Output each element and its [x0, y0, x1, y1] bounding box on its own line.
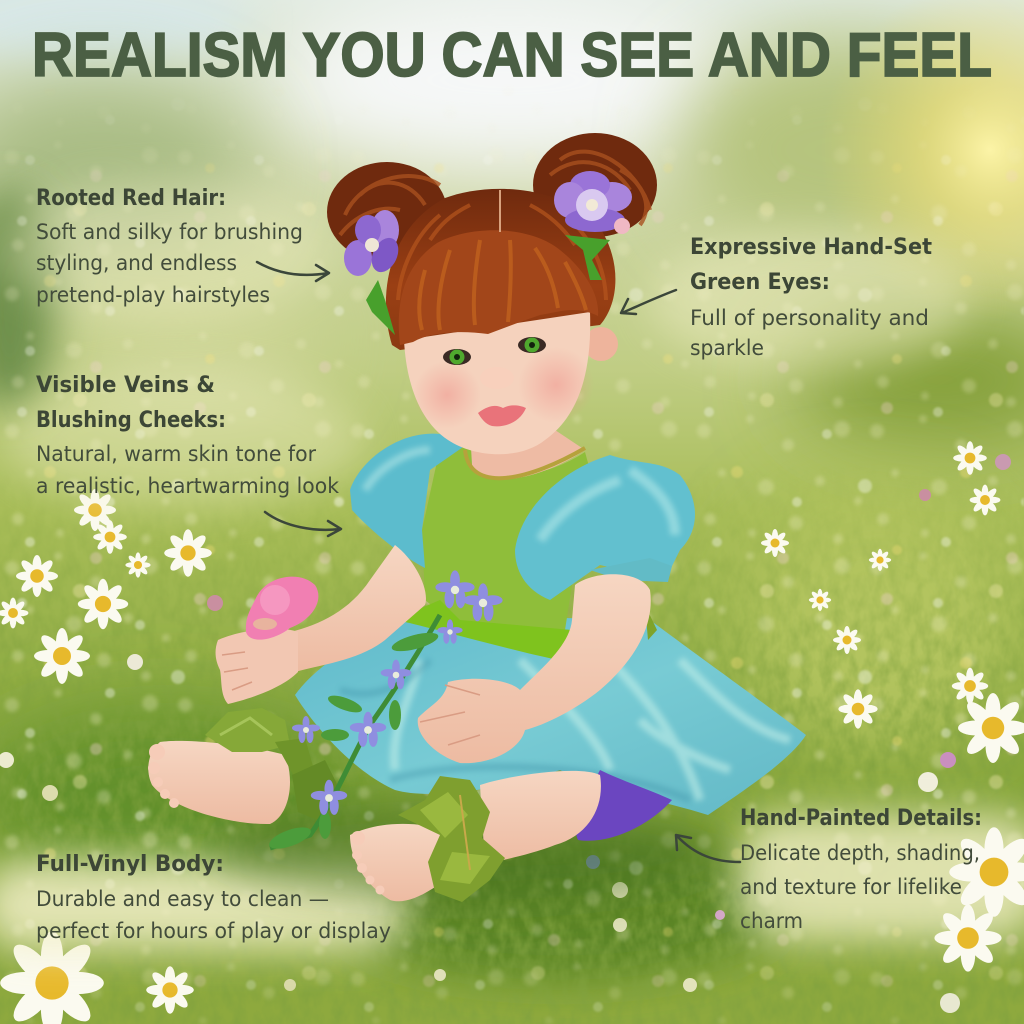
doll: right arm and hand	[418, 574, 651, 763]
doll: right hair flower	[554, 171, 632, 280]
callout: full-vinyl body: Durable and easy to clean —	[36, 887, 329, 912]
callout: green eyes: Full of personality and	[690, 306, 929, 331]
doll: green ruffle left ankle	[205, 708, 340, 822]
doll: hair back and buns	[327, 133, 657, 350]
doll: pink pacifier	[246, 577, 318, 640]
text haze panels	[0, 180, 1024, 950]
doll: left puff sleeve	[350, 434, 466, 568]
callout: full-vinyl body: Full-Vinyl Body:	[36, 852, 224, 877]
meadow flowers	[0, 441, 1024, 1024]
doll: eyes	[443, 337, 546, 365]
callout: full-vinyl body: perfect for hours of play or display	[36, 919, 391, 944]
doll: purple bloomers	[576, 770, 672, 841]
callout: green eyes: sparkle	[690, 336, 764, 361]
callout: hand-painted details: Delicate depth, shading,	[740, 841, 980, 866]
doll: green sash	[405, 600, 572, 660]
arrow: to cheeks	[265, 512, 341, 536]
doll: right sleeve	[515, 455, 695, 600]
callout: rooted red hair: styling, and endless	[36, 251, 237, 276]
doll: right foot	[350, 824, 445, 901]
callout: hand-painted details: Hand-Painted Details:	[740, 806, 982, 831]
doll: necklace	[465, 448, 585, 478]
arrow: to details	[676, 835, 740, 862]
doll: skirt	[295, 615, 806, 815]
doll: left hand	[216, 629, 298, 704]
callout: veins and cheeks	[36, 373, 340, 499]
doll: left arm	[290, 545, 426, 672]
callout: green eyes	[690, 235, 932, 361]
callout: full-vinyl body	[36, 852, 391, 944]
doll: green ruffle right ankle	[398, 776, 505, 902]
doll: mouth	[478, 405, 526, 426]
doll: left hair flower	[344, 210, 403, 335]
doll	[148, 133, 806, 902]
callout: rooted red hair: pretend-play hairstyles	[36, 283, 270, 308]
callout: green eyes: Expressive Hand-Set	[690, 235, 932, 260]
doll: vine with flowers	[267, 570, 503, 853]
callout: rooted red hair	[36, 186, 303, 308]
callout: veins and cheeks: Natural, warm skin tone for	[36, 442, 316, 467]
callout: hand-painted details: and texture for lifelike	[740, 875, 962, 900]
doll: bangs	[399, 230, 598, 345]
doll: right leg	[480, 771, 601, 865]
callout: hand-painted details: charm	[740, 909, 803, 934]
callout: veins and cheeks: Blushing Cheeks:	[36, 408, 226, 433]
doll: bodice	[422, 445, 590, 660]
callout: green eyes: Green Eyes:	[690, 270, 830, 295]
arrow: to eyes	[621, 290, 676, 314]
arrow: to hair	[257, 262, 329, 281]
callout: rooted red hair: Soft and silky for brushing	[36, 220, 303, 245]
callout: hand-painted details	[740, 806, 982, 934]
doll: left leg and foot	[148, 741, 290, 824]
doll: neck	[470, 430, 585, 479]
large daisies right	[934, 827, 1024, 972]
doll: head	[404, 312, 618, 454]
callout: veins and cheeks: a realistic, heartwarming look	[36, 474, 340, 499]
callout: rooted red hair: Rooted Red Hair:	[36, 186, 226, 211]
callout: veins and cheeks: Visible Veins &	[36, 373, 215, 398]
